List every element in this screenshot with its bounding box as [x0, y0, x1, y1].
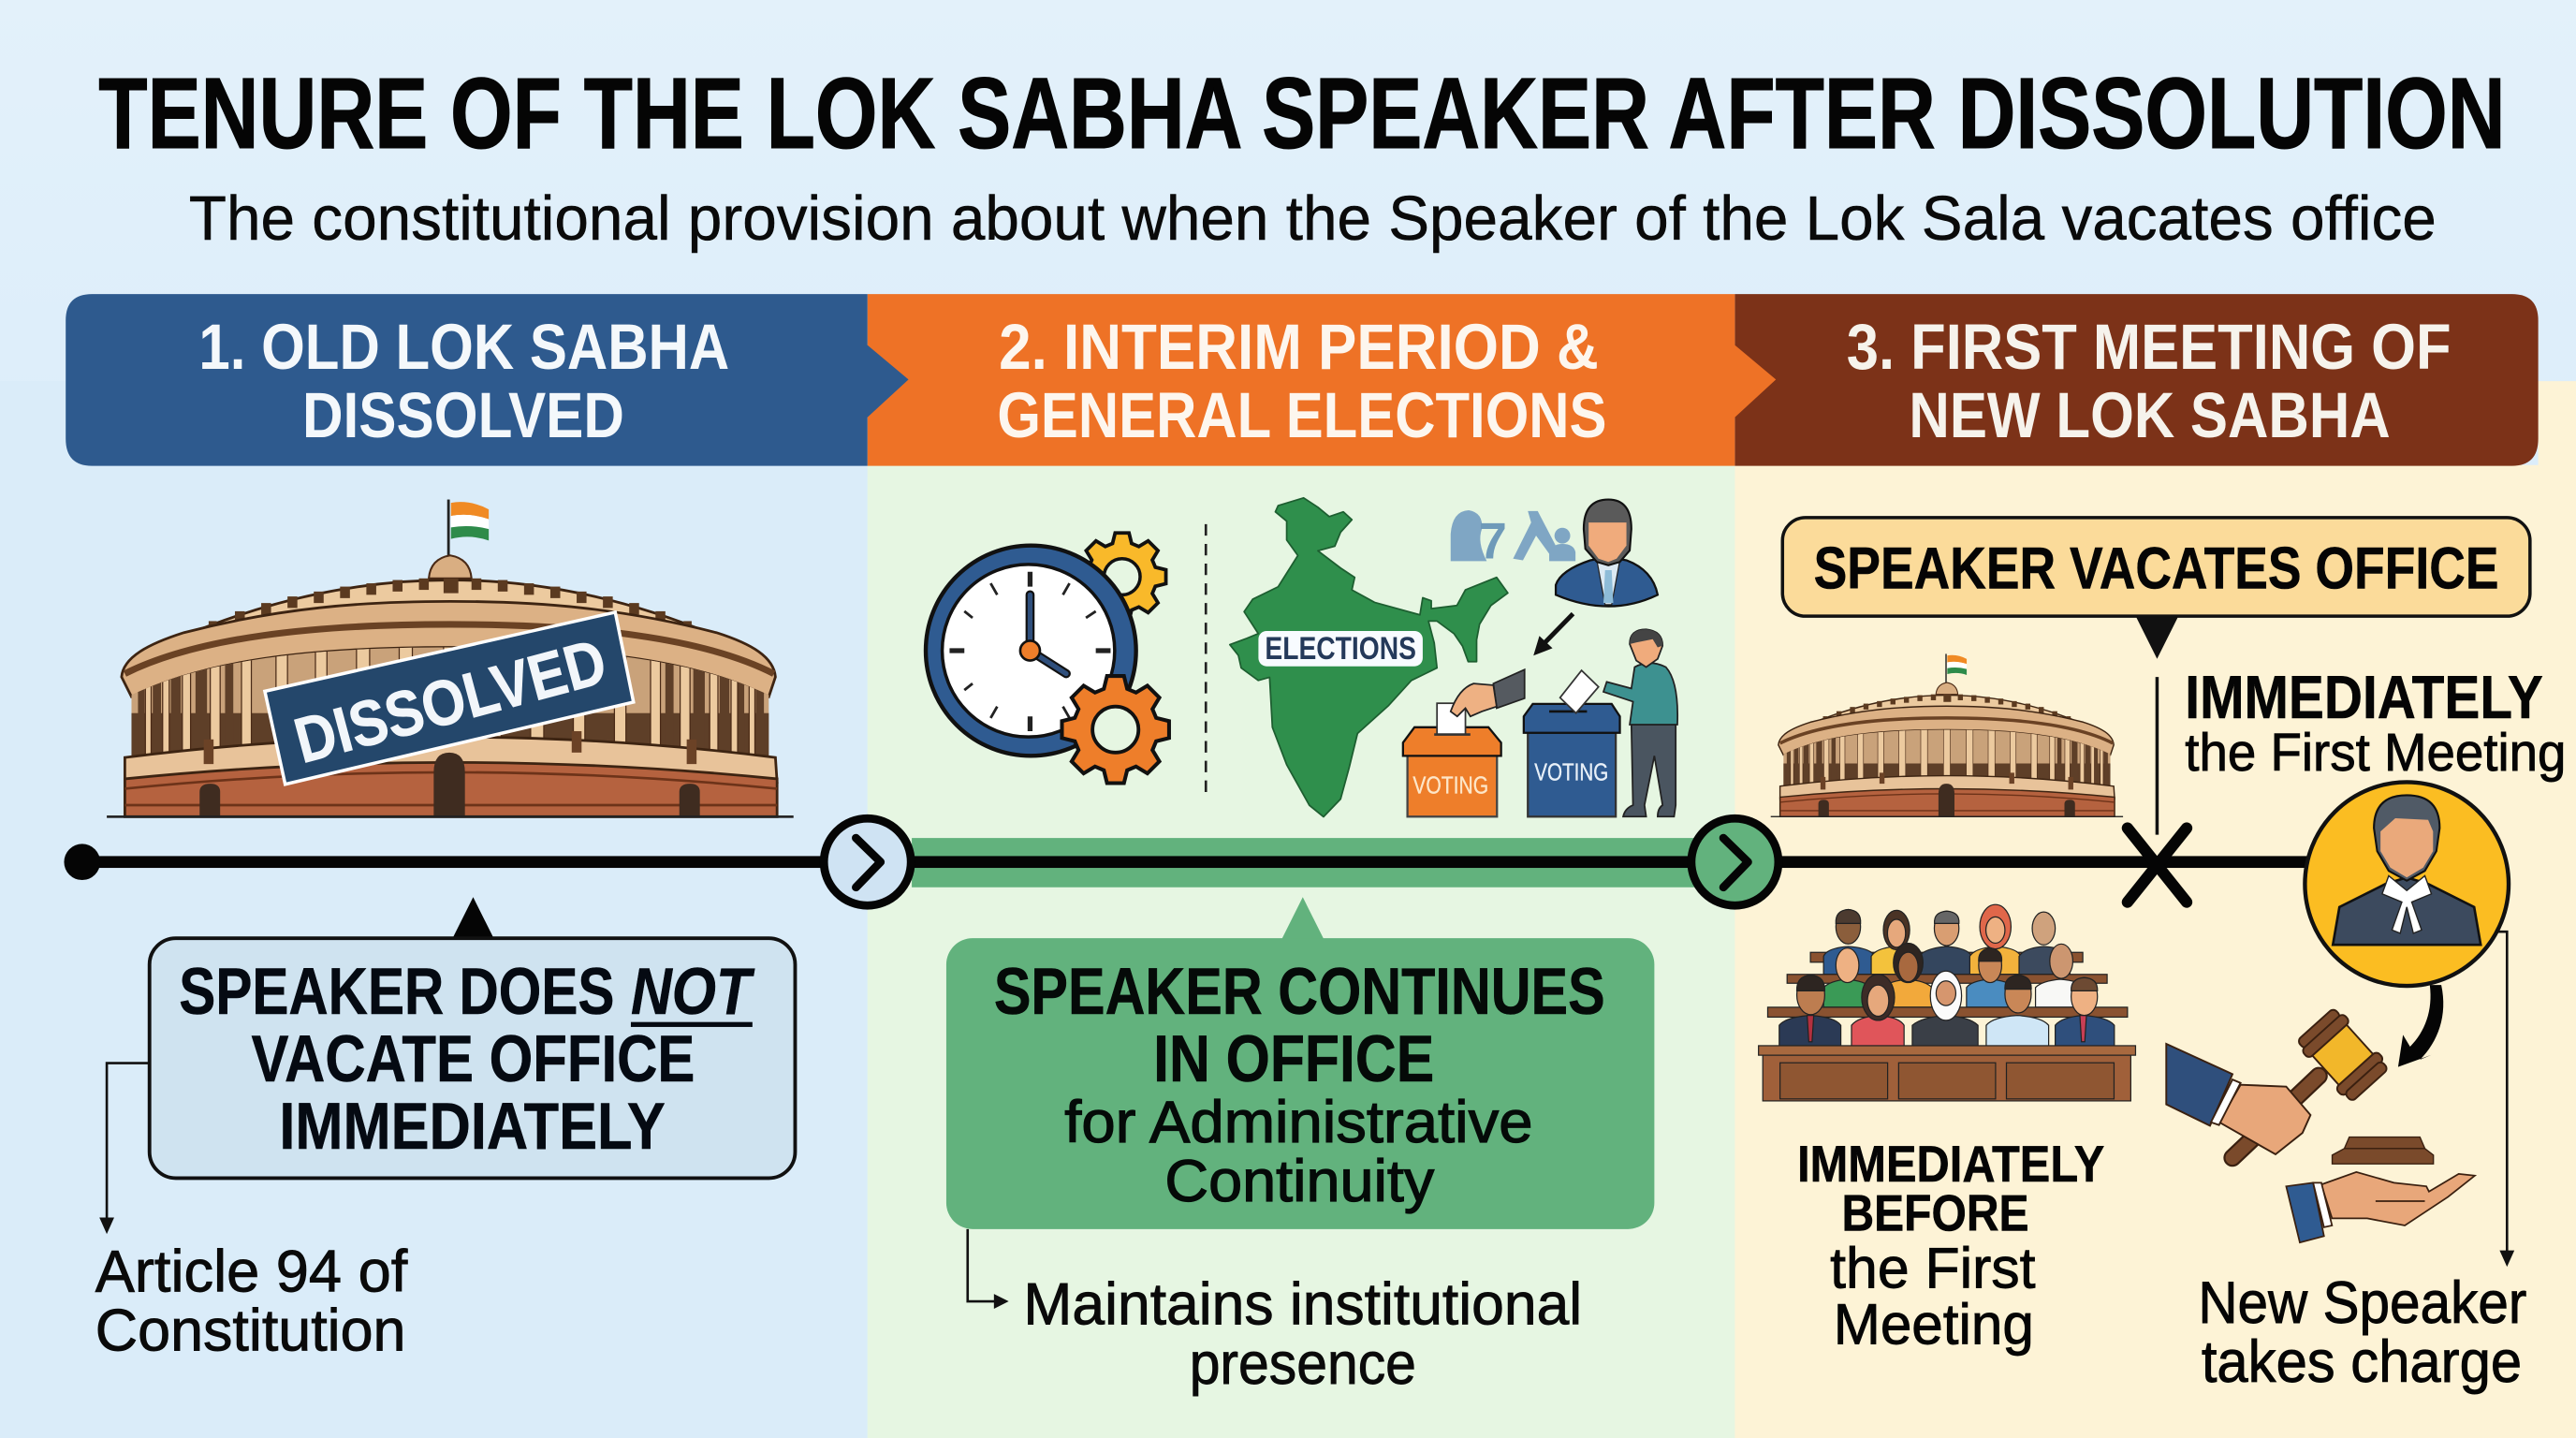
middle row tier — [1787, 975, 2107, 983]
text: immediately before the first meeting: Meeting — [1834, 1293, 2034, 1357]
icon: official in blue suit — [1556, 500, 1658, 607]
callout: speaker does not vacate: NOT — [631, 954, 755, 1028]
icon: hand dropping ballot — [1451, 669, 1525, 716]
node: blue chevron — [824, 818, 911, 905]
arrow: official to ballot — [1533, 614, 1573, 655]
icon: small parliament building — [1771, 653, 2123, 817]
header stage 1: old Lok Sabha: DISSOLVED — [302, 379, 624, 451]
panel: blue column background — [0, 381, 868, 1438]
icon: grey-blue silhouettes: 7 — [1479, 513, 1507, 570]
front row people — [1779, 971, 2115, 1046]
icon: parliament building with dissolved stamp — [107, 500, 794, 818]
callout: speaker does not vacate: VACATE OFFICE — [252, 1021, 695, 1095]
front row tier — [1767, 1007, 2128, 1017]
header stage 2: interim period — [868, 294, 1776, 466]
callout: speaker continues in office: SPEAKER CONTINUES — [994, 954, 1605, 1028]
panel: background top band — [0, 0, 2576, 477]
callout: speaker continues in office: IN OFFICE — [1153, 1021, 1434, 1095]
text: immediately before the first meeting: BEFORE — [1841, 1185, 2029, 1242]
connector: speaker to new speaker text — [2496, 932, 2514, 1267]
header stage 1: old Lok Sabha: 1. OLD LOK SABHA — [198, 311, 729, 383]
callout: speaker does not vacate: IMMEDIATELY — [279, 1089, 666, 1163]
callout: speaker vacates office — [1782, 518, 2530, 659]
stamp: dissolved: DISSOLVED — [287, 624, 614, 777]
panel: green column background — [868, 465, 1734, 1438]
node: green chevron — [1691, 818, 1778, 905]
timeline start dot — [64, 844, 100, 880]
icon: India map with elections label — [1230, 498, 1508, 816]
timeline — [64, 818, 2317, 905]
back row people — [1823, 904, 2070, 975]
callout: speaker continues in office — [946, 897, 1654, 1229]
header banner: three stage arrows — [66, 294, 2539, 466]
icon: open hand receiving — [2286, 1172, 2475, 1242]
text: immediately the first meeting: the First Meeting — [2185, 723, 2566, 782]
text: new speaker takes charge: takes charge — [2202, 1329, 2522, 1395]
timeline line — [82, 856, 2317, 868]
icon: clock with gears — [926, 533, 1169, 783]
callout: speaker does not vacate — [150, 897, 795, 1178]
desk front — [1759, 1046, 2135, 1101]
icon: orange ballot box: VOTING — [1412, 773, 1488, 800]
text: article 94: Article 94 of — [95, 1240, 408, 1305]
icon: hand holding gavel — [2166, 1005, 2391, 1158]
text: immediately before the first meeting — [1797, 1136, 2104, 1357]
text: immediately before the first meeting: IMMEDIATELY — [1797, 1136, 2104, 1193]
text: maintains institutional presence: presence — [1190, 1331, 1416, 1397]
dashed divider — [1205, 524, 1207, 799]
text: maintains institutional presence — [1023, 1272, 1582, 1397]
text: article 94: Constitution — [95, 1299, 406, 1364]
icon: audience of members — [1759, 904, 2135, 1101]
icon: yellow gear — [1078, 533, 1166, 621]
header stage 2: interim period: GENERAL ELECTIONS — [997, 379, 1606, 451]
icon: blue ballot box: VOTING — [1534, 760, 1608, 786]
subtitle: The constitutional provision about when the Speaker of the Lok Sala vacates office — [189, 184, 2437, 254]
arrow: speaker to gavel — [2398, 985, 2443, 1067]
text: immediately before the first meeting: the First — [1830, 1236, 2036, 1300]
back row tier — [1810, 952, 2083, 962]
icon: sound block — [2333, 1137, 2434, 1164]
header stage 3: first meeting: 3. FIRST MEETING OF — [1847, 311, 2452, 383]
callout: speaker continues in office: Continuity — [1164, 1149, 1435, 1214]
text: new speaker takes charge: New Speaker — [2198, 1270, 2526, 1336]
green interim band — [912, 838, 1697, 888]
icon: blue ballot box — [1524, 704, 1620, 816]
text: maintains institutional presence: Maintains institutional — [1023, 1272, 1582, 1338]
callout: speaker continues in office: for Administrative — [1064, 1090, 1533, 1155]
arrow: callout to institutional presence — [968, 1229, 1009, 1309]
connector: vacates line to timeline — [2156, 677, 2158, 835]
header stage 2: interim period: 2. INTERIM PERIOD & — [999, 311, 1599, 383]
panel: cream column background — [1734, 381, 2576, 1438]
marker: X at vacate point — [2128, 829, 2187, 902]
text: immediately the first meeting — [2185, 663, 2566, 782]
arrow: callout to article 94 — [99, 1064, 150, 1234]
text: article 94 — [95, 1240, 408, 1364]
header stage 3: first meeting — [1734, 294, 2539, 466]
header stage 3: first meeting: NEW LOK SABHA — [1909, 379, 2391, 451]
icon: voter casting ballot — [1560, 629, 1677, 816]
middle row people — [1823, 943, 2085, 1007]
icon: orange ballot box — [1403, 703, 1501, 816]
text: new speaker takes charge — [2198, 1270, 2526, 1395]
label: elections: ELECTIONS — [1265, 631, 1416, 667]
callout: speaker does not vacate: SPEAKER DOES — [179, 954, 614, 1028]
icon: new speaker portrait — [2305, 782, 2509, 986]
icon: orange gear — [1061, 676, 1169, 783]
icon: grey-blue silhouettes — [1451, 510, 1575, 570]
header stage 1: old Lok Sabha — [66, 294, 909, 466]
